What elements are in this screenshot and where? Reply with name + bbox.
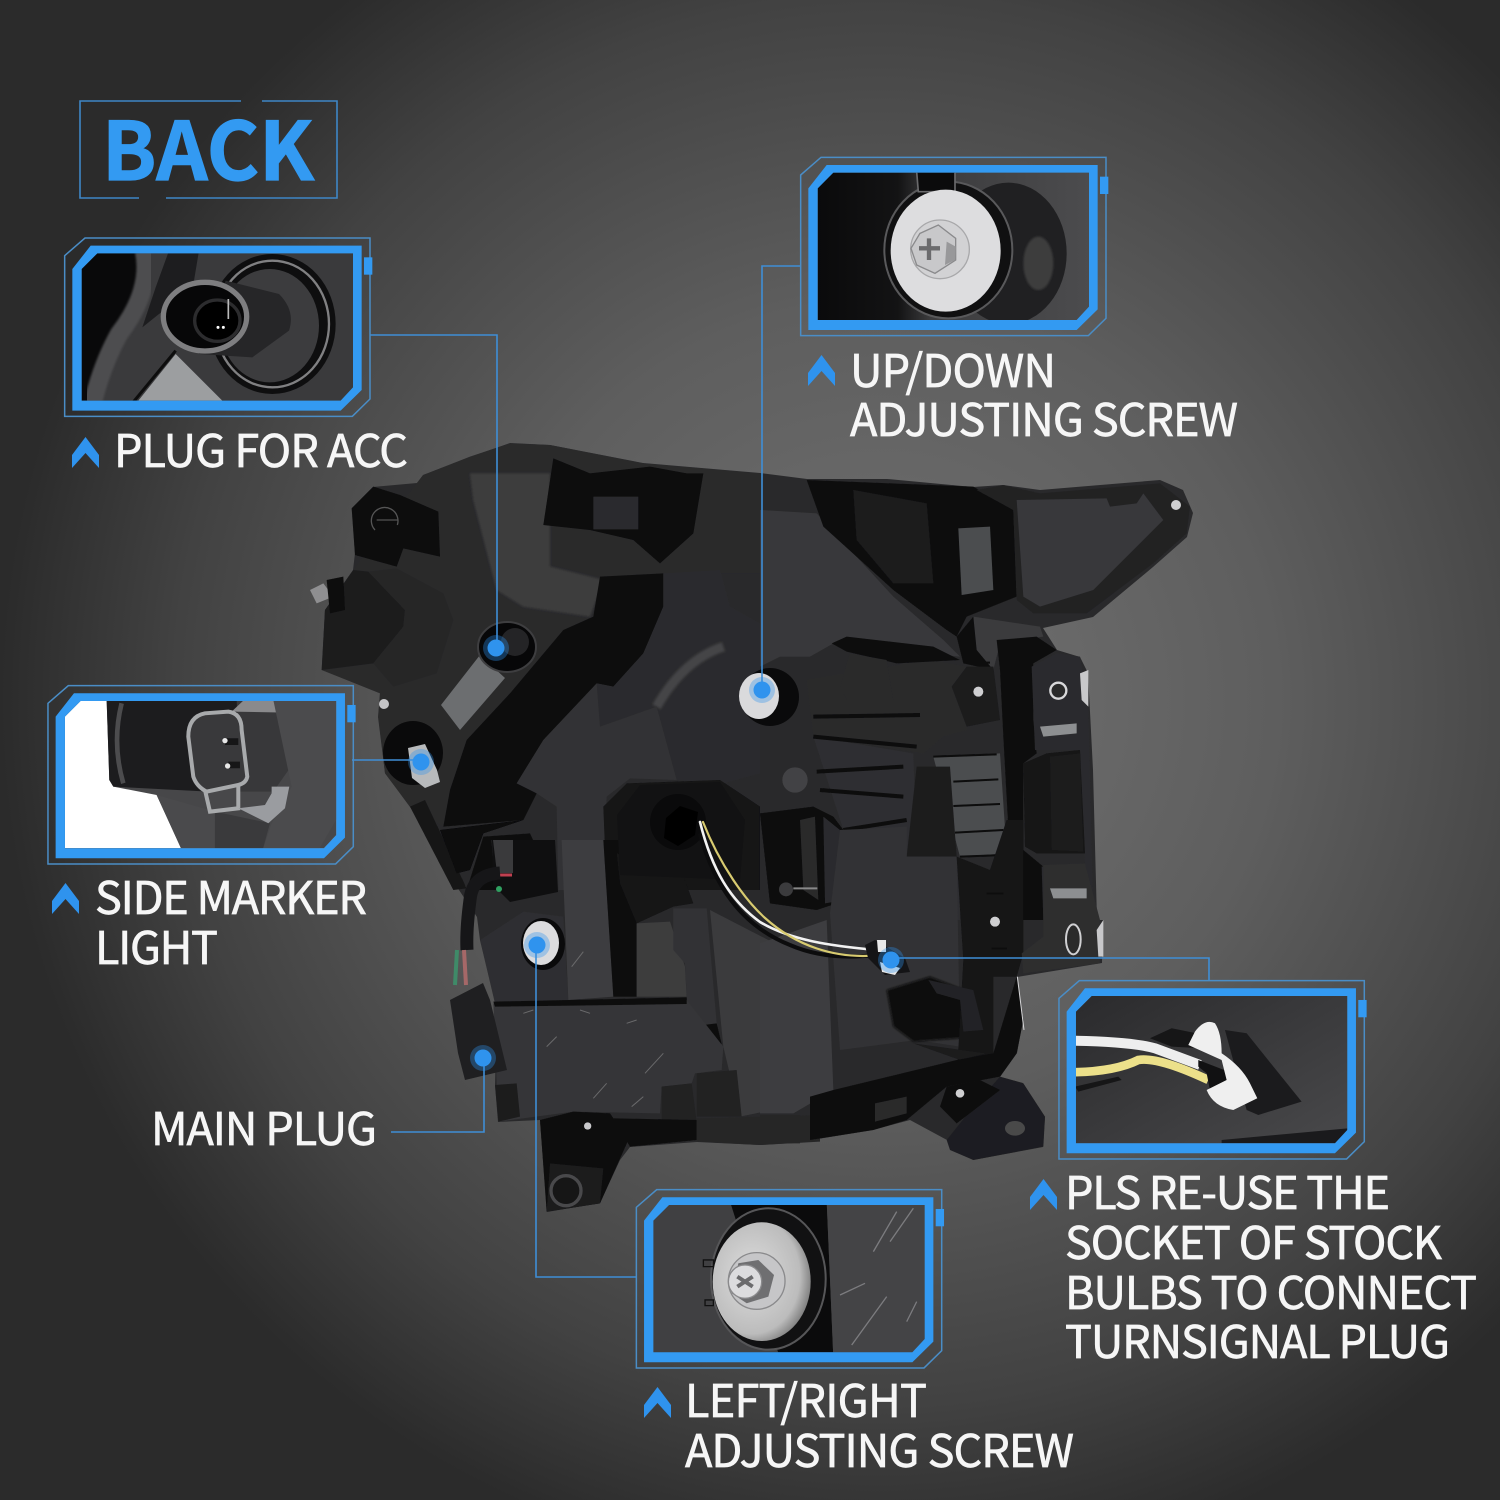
leader line: side marker [352, 759, 421, 761]
thick blue frame [1067, 988, 1356, 1153]
label: left/right adjusting screw: ADJUSTING SCREW [685, 1415, 1074, 1480]
photo: ACC plug [65, 238, 372, 416]
lower-right housing section [760, 820, 1103, 1160]
leader line: up/down screw [762, 266, 800, 690]
up/down screw [739, 668, 799, 726]
mounting screw top-left [379, 699, 389, 709]
thin outer frame [636, 1190, 942, 1368]
label: side marker light: SIDE MARKER [95, 862, 367, 927]
upper-left housing section [310, 443, 760, 890]
label: side marker light: LIGHT [95, 912, 218, 977]
frame tab [347, 705, 356, 722]
photo: turn signal socket wiring [1076, 996, 1348, 1143]
icon: chevron [1030, 1179, 1057, 1210]
label: turn signal socket note: BULBS TO CONNECT [1065, 1257, 1477, 1322]
label: left/right adjusting screw [644, 1365, 1074, 1480]
label: plug for ACC: PLUG FOR ACC [114, 415, 408, 480]
photo: screw [654, 1205, 924, 1352]
icon: chevron [644, 1387, 671, 1418]
lower-middle housing section [480, 840, 820, 1212]
turn signal socket [865, 940, 910, 975]
label: left/right adjusting screw: LEFT/RIGHT [685, 1365, 927, 1430]
frame tab [364, 257, 372, 275]
upper-right housing section [755, 480, 1190, 920]
icon: chevron [52, 883, 79, 914]
panel: left/right adjusting screw [636, 1190, 944, 1368]
title badge: BACK: BACK [102, 88, 315, 204]
label: turn signal socket note [1030, 1157, 1477, 1371]
adjuster hole [478, 622, 536, 672]
panel: turn signal socket [1059, 981, 1367, 1159]
thick blue frame [644, 1197, 933, 1362]
left/right screw [521, 918, 565, 970]
leader line: turn signal socket [891, 958, 1209, 980]
callout dots [408, 635, 904, 1071]
main plug [450, 983, 507, 1080]
side marker socket [383, 721, 443, 788]
thin outer frame [1059, 981, 1364, 1159]
bulb hole [617, 782, 745, 880]
frame tab [1100, 177, 1108, 194]
panel: up/down adjusting screw [801, 157, 1108, 336]
icon: chevron [808, 355, 835, 386]
label: up/down adjusting screw: ADJUSTING SCREW [850, 384, 1238, 449]
panel: plug for ACC [65, 238, 372, 416]
thick blue frame [56, 693, 345, 858]
label: turn signal socket note: TURNSIGNAL PLUG [1065, 1306, 1450, 1371]
photo: side marker connector [65, 701, 336, 848]
leader line: plug for ACC [370, 335, 497, 648]
icon: chevron [72, 437, 99, 468]
label: side marker light [52, 862, 367, 977]
headlight housing back view [310, 443, 1193, 1212]
panel: side marker light [48, 686, 356, 864]
label: main plug: MAIN PLUG [151, 1093, 377, 1158]
label: turn signal socket note: PLS RE-USE THE [1065, 1157, 1390, 1222]
grey sticker [441, 655, 505, 730]
main plug cable [455, 873, 500, 985]
label: up/down adjusting screw: UP/DOWN [850, 335, 1056, 400]
frame tab [1358, 1000, 1367, 1017]
thick blue frame [808, 165, 1098, 330]
thick blue frame [72, 246, 362, 411]
label: turn signal socket note: SOCKET OF STOCK [1065, 1207, 1442, 1272]
label: up/down adjusting screw [808, 335, 1238, 449]
photo: screw [815, 170, 1092, 324]
housing silhouette [322, 443, 1193, 1212]
leader line: left/right screw [536, 945, 636, 1277]
frame tab [936, 1209, 944, 1226]
thin outer frame [48, 686, 353, 864]
wires to turn signal socket [700, 822, 880, 957]
leader line: main plug [391, 1060, 484, 1132]
thin outer frame [65, 238, 370, 416]
small connector [492, 840, 558, 902]
thin outer frame [801, 157, 1106, 336]
